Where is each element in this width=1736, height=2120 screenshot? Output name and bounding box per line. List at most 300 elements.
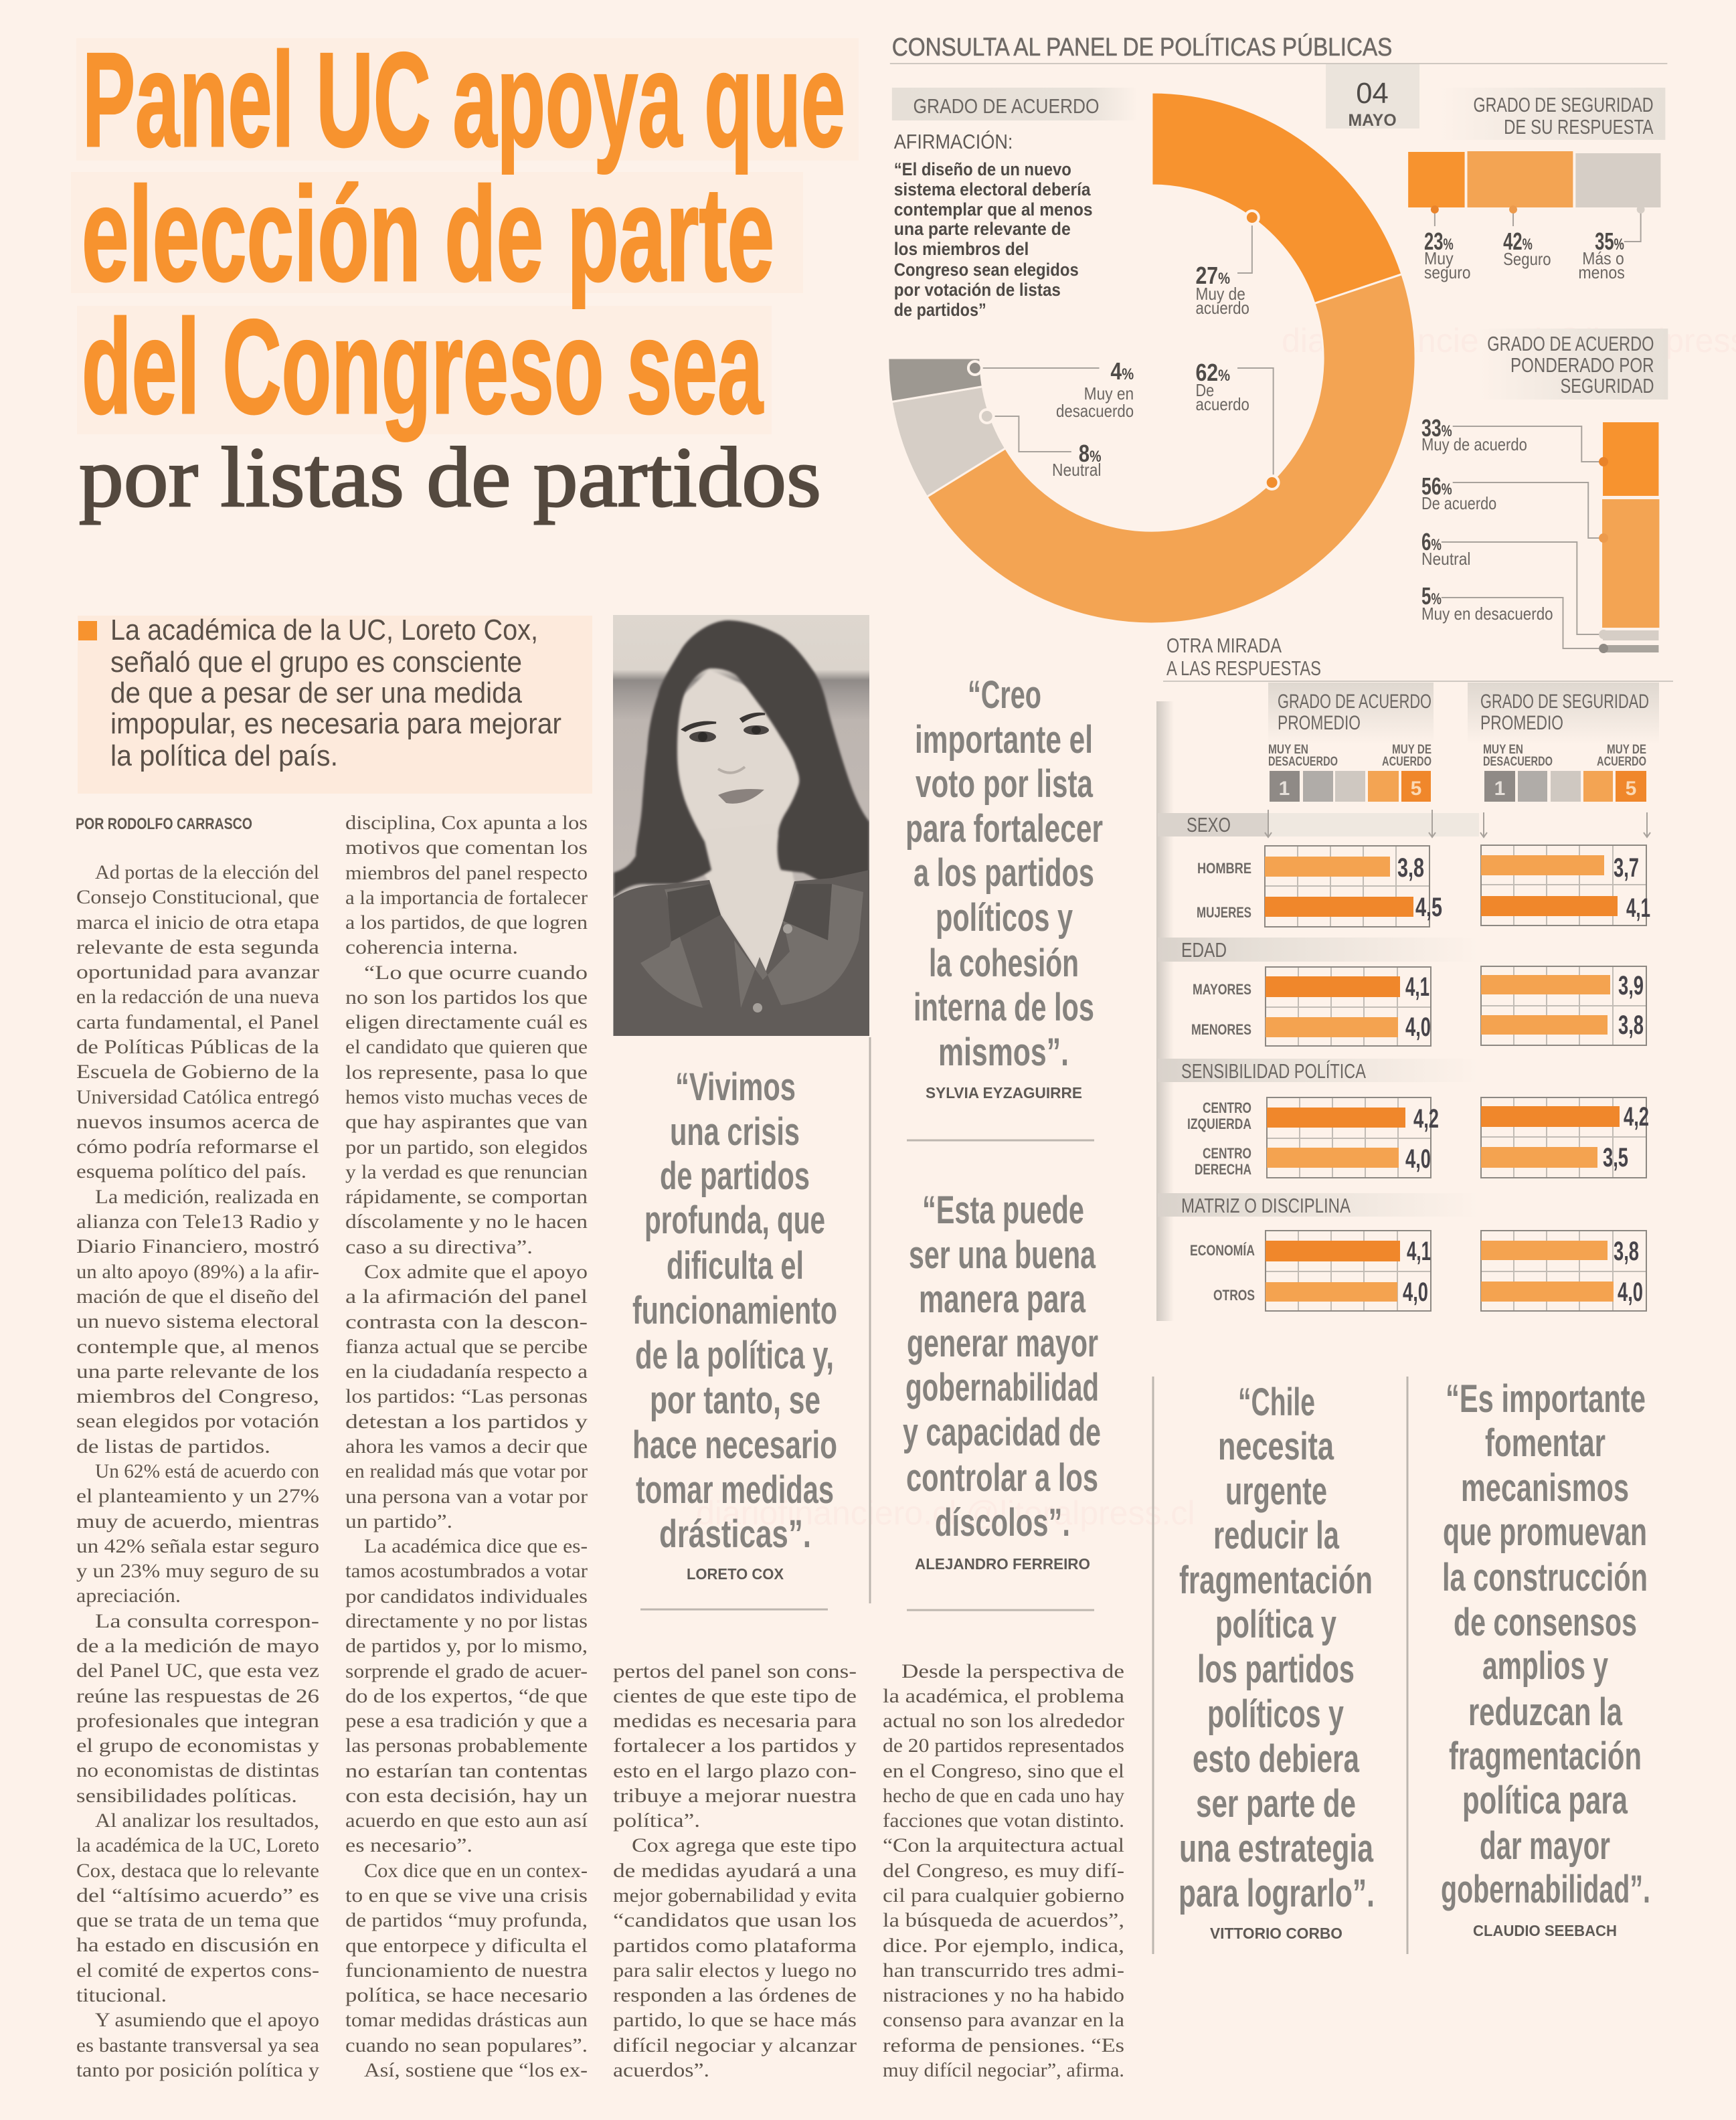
chart: sexo acuerdo: 4,5 <box>1415 893 1442 922</box>
quote: Claudio Seebach: amplios y <box>1482 1644 1608 1688</box>
quote: Vittorio Corbo: reducir la <box>1213 1514 1340 1557</box>
article column 2: no estarían tan contentas <box>345 1760 588 1782</box>
article column 3: partidos como plataforma <box>613 1935 857 1957</box>
article column 2: es necesario”. <box>345 1834 472 1856</box>
scale arrows <box>1265 810 1650 837</box>
quote: Alejandro Ferreiro: y capacidad de <box>903 1411 1101 1454</box>
byline: POR RODOLFO CARRASCO <box>76 815 252 833</box>
article column 2: motivos que comentan los <box>345 836 588 859</box>
row labels: sensibilidad politica: DERECHA <box>1195 1161 1251 1178</box>
quote: Claudio Seebach: política para <box>1462 1779 1628 1822</box>
donut chart: grado de acuerdo: Neutral <box>1052 461 1101 480</box>
chart: sexo seguridad: 4,1 <box>1626 893 1650 923</box>
article column 3: tribuye a mejorar nuestra <box>613 1785 857 1807</box>
grado de acuerdo label and statement: Congreso sean elegidos <box>894 260 1079 280</box>
article column 1: sensibilidades políticas. <box>76 1785 297 1807</box>
quote: Alejandro Ferreiro: díscolos”. <box>935 1501 1070 1544</box>
article column 1: de listas de partidos. <box>76 1435 270 1458</box>
quote: Vittorio Corbo <box>1179 1381 1375 1942</box>
column header: grado de seguridad promedio: DESACUERDO <box>1483 755 1553 769</box>
article column 1: Un 62% está de acuerdo con <box>95 1460 319 1482</box>
subtitle: por listas de partidos: por listas de partidos <box>79 430 821 525</box>
article column 2: “Lo que ocurre cuando <box>364 962 588 984</box>
row labels: matriz o disciplina <box>1190 1242 1255 1304</box>
article column 4: han transcurrido tres admi- <box>883 1959 1124 1981</box>
quote: Loreto Cox: tomar medidas <box>636 1468 834 1512</box>
article column 1: una parte relevante de los <box>76 1360 319 1383</box>
grado de acuerdo label and statement: los miembros del <box>894 239 1029 259</box>
deck summary box <box>78 614 592 794</box>
chart: edad acuerdo: 4,1 <box>1405 972 1429 1002</box>
article column 1: cómo podría reformarse el <box>76 1136 319 1158</box>
article column 2: un partido”. <box>345 1510 452 1532</box>
article column 4: del Congreso, es muy difí- <box>883 1860 1124 1882</box>
column header: grado de acuerdo promedio: PROMEDIO <box>1278 712 1361 734</box>
article column 2: coherencia interna. <box>345 936 518 958</box>
quote: Loreto Cox <box>632 1065 837 1583</box>
chart: edad seguridad: 3,8 <box>1618 1010 1644 1040</box>
chart: matriz seguridad: 4,0 <box>1618 1277 1643 1307</box>
row labels: sexo <box>1197 860 1251 921</box>
quote: Sylvia Eyzaguirre <box>905 673 1103 1101</box>
row labels: sensibilidad politica: IZQUIERDA <box>1187 1116 1251 1132</box>
section band: sexo: SEXO <box>1187 813 1231 836</box>
section band: matriz o disciplina: MATRIZ O DISCIPLINA <box>1181 1194 1351 1217</box>
article column 3: “candidatos que usan los <box>613 1909 857 1931</box>
section heading: Consulta al panel: CONSULTA AL PANEL DE POLÍTICAS PÚBLICAS <box>892 33 1392 62</box>
row labels: edad <box>1191 981 1251 1038</box>
quote: Sylvia Eyzaguirre: voto por lista <box>916 762 1094 806</box>
headline highlight backgrounds and orange title: elección de parte <box>82 160 774 309</box>
donut chart: grado de acuerdo <box>888 92 1415 624</box>
quote: Vittorio Corbo: fragmentación <box>1179 1559 1373 1602</box>
quote: Alejandro Ferreiro: manera para <box>919 1277 1086 1321</box>
article column 1: alianza con Tele13 Radio y <box>76 1211 319 1233</box>
donut chart: grado de acuerdo: acuerdo <box>1195 395 1249 414</box>
article column 1: tanto por posición política y <box>76 2059 319 2081</box>
article column 1: un alto apoyo (89%) a la afir- <box>76 1261 319 1283</box>
article column 1: esquema político del país. <box>76 1160 307 1182</box>
chart: sexo acuerdo <box>1265 846 1442 927</box>
row labels: sexo: MUJERES <box>1197 904 1251 921</box>
article column 4: nistraciones y no ha habido <box>883 1984 1124 2006</box>
quote: Loreto Cox: hace necesario <box>632 1423 837 1467</box>
quote: Vittorio Corbo: política y <box>1215 1603 1336 1646</box>
article column 1: un 42% señala estar seguro <box>76 1535 319 1557</box>
article column 1: Consejo Constitucional, que <box>76 886 319 908</box>
donut chart: grado de acuerdo: Muy en <box>1084 385 1134 404</box>
article column 3: mejor gobernabilidad y evita <box>613 1884 857 1907</box>
grado de seguridad: stacked bar: 23% <box>1424 228 1454 255</box>
article column 2: cuando no sean populares”. <box>345 2034 588 2056</box>
article column 3: partido, lo que se hace más <box>613 2009 857 2031</box>
column header: grado de seguridad promedio: ACUERDO <box>1597 755 1646 769</box>
column header: grado de seguridad promedio: GRADO DE SEGURIDAD <box>1480 691 1649 713</box>
section band: edad: EDAD <box>1181 938 1227 962</box>
grado de seguridad: header: DE SU RESPUESTA <box>1504 115 1654 139</box>
article column 1: en la redacción de una nueva <box>76 986 319 1008</box>
article column 2: funcionamiento de nuestra <box>345 1959 588 1981</box>
row labels: sensibilidad politica <box>1187 1099 1251 1178</box>
column header: grado de acuerdo promedio: 1 <box>1279 778 1290 800</box>
section heading: otra mirada: A LAS RESPUESTAS <box>1166 656 1321 680</box>
article column 1: es bastante transversal ya sea <box>76 2034 319 2056</box>
quote: Alejandro Ferreiro: ser una buena <box>909 1233 1096 1277</box>
article column 4: hecho de que en cada uno hay <box>883 1785 1124 1807</box>
chart: edad acuerdo <box>1266 967 1431 1046</box>
section heading: otra mirada: OTRA MIRADA <box>1166 634 1282 657</box>
article column 1: mación de que el diseño del <box>76 1286 319 1308</box>
quote: Loreto Cox: “Vivimos <box>675 1065 796 1109</box>
section band: matriz o disciplina <box>1158 1193 1479 1217</box>
row labels: edad: MENORES <box>1191 1021 1251 1038</box>
grado de seguridad: stacked bar: menos <box>1578 264 1625 282</box>
grado de acuerdo ponderado: vertical stacked bar: Neutral <box>1421 550 1470 569</box>
article column 2: que entorpece y dificulta el <box>345 1935 588 1957</box>
chart: sensibilidad seguridad: 4,2 <box>1624 1102 1649 1132</box>
deck summary box: impopular, es necesaria para mejorar <box>110 707 561 740</box>
article column 2: a la importancia de fortalecer <box>345 887 588 909</box>
column header: grado de seguridad promedio: MUY DE <box>1607 743 1646 757</box>
quote: Vittorio Corbo: políticos y <box>1207 1692 1344 1736</box>
quote: Sylvia Eyzaguirre: mismos”. <box>938 1031 1069 1074</box>
article column 2: Así, sostiene que “los ex- <box>364 2059 588 2081</box>
chart: edad seguridad <box>1481 966 1646 1045</box>
grado de acuerdo ponderado: vertical stacked bar: Muy en desacuerdo <box>1421 605 1553 624</box>
article column 2: de partidos “muy profunda, <box>345 1909 588 1931</box>
article column 3: responden a las órdenes de <box>613 1984 857 2006</box>
article column 1: y un 23% muy seguro de su <box>76 1560 319 1582</box>
grado de acuerdo ponderado: vertical stacked bar: Muy de acuerdo <box>1421 436 1527 454</box>
deck summary box: la política del país. <box>110 739 338 772</box>
article column 2: miembros del panel respecto <box>345 862 588 884</box>
quote: Alejandro Ferreiro: generar mayor <box>907 1322 1098 1365</box>
quote: Vittorio Corbo: los partidos <box>1197 1648 1355 1691</box>
date tag: MAYO <box>1348 111 1397 130</box>
column header: grado de acuerdo promedio <box>1268 683 1434 802</box>
grado de seguridad: stacked bar: seguro <box>1424 264 1470 282</box>
quote: Claudio Seebach: la construcción <box>1442 1556 1648 1599</box>
quote: Claudio Seebach: fomentar <box>1485 1421 1605 1465</box>
article column 3: de medidas ayudará a una <box>613 1860 857 1882</box>
article column 1: de Políticas Públicas de la <box>76 1036 319 1058</box>
article column 1: marca el inicio de otra etapa <box>76 911 319 934</box>
article column 2: pese a esa tradición y que a <box>345 1710 588 1732</box>
grado de acuerdo ponderado: vertical stacked bar: 5% <box>1421 583 1442 610</box>
watermark <box>696 322 1736 1532</box>
quote: Loreto Cox: LORETO COX <box>687 1565 784 1583</box>
grado de acuerdo label and statement <box>892 88 1138 320</box>
article column 3: Cox agrega que este tipo <box>632 1834 857 1856</box>
headline highlight backgrounds and orange title: Panel UC apoya que <box>82 25 845 175</box>
donut chart: grado de acuerdo: desacuerdo <box>1056 402 1134 421</box>
grado de acuerdo ponderado: vertical stacked bar: 6% <box>1421 529 1442 555</box>
column header: grado de seguridad promedio: 1 <box>1494 778 1505 800</box>
left rule of comparison table <box>1156 701 1174 1321</box>
quote: Sylvia Eyzaguirre: la cohesión <box>929 942 1079 985</box>
article column 4: en el Congreso, sino que el <box>883 1760 1124 1782</box>
chart: sensibilidad acuerdo <box>1267 1097 1439 1178</box>
grado de seguridad: stacked bar: Más o <box>1582 250 1624 268</box>
article column 2: fianza actual que se percibe <box>345 1336 588 1358</box>
grado de acuerdo ponderado: header: PONDERADO POR <box>1510 353 1654 377</box>
chart: edad acuerdo: 4,0 <box>1405 1012 1431 1042</box>
watermark: diariofinanciero.cl @litoralpress.cl <box>696 1494 1195 1532</box>
article column 2: Cox dice que en un contex- <box>364 1860 588 1882</box>
quote: Vittorio Corbo: para lograrlo”. <box>1179 1872 1375 1915</box>
article column 4: consenso para avanzar en la <box>883 2009 1124 2031</box>
column header: grado de seguridad promedio: PROMEDIO <box>1480 712 1563 734</box>
grado de acuerdo label and statement: “El diseño de un nuevo <box>894 159 1071 179</box>
column header: grado de acuerdo promedio: GRADO DE ACUERDO <box>1278 691 1431 713</box>
article column 4: facciones que votan distinto. <box>883 1809 1124 1832</box>
article column 1: apreciación. <box>76 1585 181 1607</box>
quote: Claudio Seebach: “Es importante <box>1446 1377 1646 1421</box>
quote: Alejandro Ferreiro <box>903 1188 1101 1573</box>
row labels: edad: MAYORES <box>1193 981 1251 998</box>
column header: grado de acuerdo promedio: MUY EN <box>1268 743 1308 757</box>
article column 2: de partidos y, por lo mismo, <box>345 1635 588 1657</box>
article column 1: La consulta correspon- <box>95 1610 319 1632</box>
grado de acuerdo label and statement: contemplar que al menos <box>894 199 1093 219</box>
quote: Claudio Seebach: de consensos <box>1454 1601 1637 1644</box>
chart: sensibilidad seguridad: 3,5 <box>1603 1143 1628 1172</box>
article column 1: titucional. <box>76 1984 167 2006</box>
article column 1: del Panel UC, que esta vez <box>76 1660 319 1682</box>
grado de seguridad: stacked bar: Seguro <box>1503 250 1551 269</box>
grado de seguridad: stacked bar: Muy <box>1424 250 1454 268</box>
article column 4: cil para cualquier gobierno <box>883 1884 1124 1907</box>
article column 4: actual no son los alrededor <box>883 1710 1124 1732</box>
quote: Claudio Seebach: CLAUDIO SEEBACH <box>1473 1922 1617 1939</box>
article column 4: de 20 partidos representados <box>883 1735 1124 1757</box>
grado de acuerdo ponderado: header <box>1477 329 1668 400</box>
photo: portrait of Loreto Cox <box>613 615 869 1036</box>
article column 2: en la ciudadanía respecto a <box>345 1360 588 1383</box>
article column 1: Escuela de Gobierno de la <box>76 1061 319 1083</box>
article column 1: que se trata de un tema que <box>76 1909 319 1931</box>
quote: Vittorio Corbo: urgente <box>1225 1470 1327 1513</box>
section band: sensibilidad politica: SENSIBILIDAD POLÍTICA <box>1181 1059 1366 1083</box>
chart: matriz acuerdo: 4,1 <box>1407 1237 1431 1266</box>
article column 1: nuevos insumos acerca de <box>76 1111 319 1133</box>
article column 4: la búsqueda de acuerdos”, <box>883 1909 1124 1931</box>
quote: Claudio Seebach <box>1441 1377 1650 1939</box>
headline highlight backgrounds and orange title: del Congreso sea <box>82 292 764 442</box>
column header: grado de acuerdo promedio: MUY DE <box>1392 743 1431 757</box>
article column 4 <box>883 1660 1124 2081</box>
article column 1: ha estado en discusión en <box>76 1934 319 1956</box>
row labels: sensibilidad politica: CENTRO <box>1203 1099 1251 1116</box>
column header: grado de acuerdo promedio: 5 <box>1411 778 1421 800</box>
quote: Alejandro Ferreiro: “Esta puede <box>922 1188 1084 1232</box>
date tag: 04 <box>1356 77 1389 110</box>
article column 4: “Con la arquitectura actual <box>883 1834 1124 1856</box>
grado de acuerdo ponderado: vertical stacked bar: 33% <box>1421 415 1452 442</box>
deck summary box: La académica de la UC, Loreto Cox, <box>110 614 538 646</box>
quote: Vittorio Corbo: una estrategia <box>1179 1827 1374 1870</box>
quote: Sylvia Eyzaguirre: a los partidos <box>914 851 1094 895</box>
quote: Claudio Seebach: dar mayor <box>1480 1824 1610 1868</box>
quote: Loreto Cox: una crisis <box>670 1110 800 1154</box>
article column 1: profesionales que integran <box>76 1710 319 1732</box>
donut chart: grado de acuerdo: acuerdo <box>1195 299 1249 318</box>
quote: Sylvia Eyzaguirre: “Creo <box>968 673 1041 717</box>
article column 2: tamos acostumbrados a votar <box>345 1560 588 1582</box>
quote: Loreto Cox: de partidos <box>660 1154 810 1198</box>
article column 1 <box>76 861 319 2081</box>
quote: Claudio Seebach: reduzcan la <box>1468 1690 1623 1734</box>
article column 4: Desde la perspectiva de <box>901 1660 1124 1682</box>
quote: Sylvia Eyzaguirre: SYLVIA EYZAGUIRRE <box>926 1084 1082 1101</box>
grado de acuerdo ponderado: vertical stacked bar <box>1421 415 1659 653</box>
article column 2: a la afirmación del panel <box>345 1286 588 1308</box>
donut chart: grado de acuerdo: 62% <box>1195 359 1230 386</box>
article column 2: no son los partidos los que <box>345 986 588 1008</box>
grado de acuerdo ponderado: header: GRADO DE ACUERDO <box>1487 332 1654 355</box>
article column 1: carta fundamental, el Panel <box>76 1011 319 1033</box>
quote: Sylvia Eyzaguirre: importante el <box>915 718 1093 762</box>
article column 1: Cox, destaca que lo relevante <box>76 1860 319 1882</box>
quote: Claudio Seebach: mecanismos <box>1461 1466 1629 1510</box>
donut chart: grado de acuerdo: De <box>1195 381 1214 400</box>
donut chart: grado de acuerdo: Muy de <box>1195 285 1245 304</box>
article column 1: un nuevo sistema electoral <box>76 1310 319 1332</box>
article column 3: acuerdos”. <box>613 2059 709 2081</box>
article column 2: por un partido, son elegidos <box>345 1136 588 1158</box>
quote: Sylvia Eyzaguirre: para fortalecer <box>905 807 1103 851</box>
quote: Vittorio Corbo: necesita <box>1218 1425 1334 1468</box>
article column 1: Universidad Católica entregó <box>76 1086 319 1108</box>
article column 1: la académica de la UC, Loreto <box>76 1834 319 1856</box>
quote: Loreto Cox: funcionamiento <box>632 1289 837 1332</box>
article column 2 <box>345 812 588 2081</box>
article column 2: y la verdad es que renuncian <box>345 1161 588 1183</box>
article column 2: contrasta con la descon- <box>345 1311 588 1333</box>
quote: Claudio Seebach: que promuevan <box>1443 1510 1647 1554</box>
article column 1: oportunidad para avanzar <box>76 961 319 983</box>
grado de seguridad: header <box>1439 88 1665 140</box>
article column 3: cientes de que este tipo de <box>613 1685 857 1707</box>
article column 2: acuerdo en que esto aun así <box>345 1809 588 1832</box>
grado de seguridad: header: GRADO DE SEGURIDAD <box>1473 93 1654 116</box>
article column 2: directamente y no por listas <box>345 1610 588 1632</box>
chart: sexo seguridad <box>1481 845 1650 925</box>
section band: edad <box>1158 938 1479 962</box>
row labels: sexo: HOMBRE <box>1197 860 1251 877</box>
article column 1: el comité de expertos cons- <box>76 1959 319 1981</box>
chart: sexo seguridad: 3,7 <box>1614 853 1639 883</box>
article column 2: por candidatos individuales <box>345 1585 588 1607</box>
column header: grado de seguridad promedio: 5 <box>1626 778 1636 800</box>
grado de seguridad: stacked bar: 35% <box>1595 228 1624 255</box>
grado de acuerdo ponderado: vertical stacked bar: 56% <box>1421 473 1452 500</box>
article column 2: el candidato que quieren que <box>345 1036 588 1058</box>
headline highlight backgrounds and orange title <box>71 25 859 442</box>
grado de acuerdo label and statement: de partidos” <box>894 300 986 320</box>
article column 1: el grupo de economistas y <box>76 1735 319 1757</box>
article column 2: to en que se vive una crisis <box>345 1884 588 1907</box>
quote: Loreto Cox: drásticas”. <box>659 1512 811 1556</box>
chart: matriz seguridad <box>1481 1231 1646 1311</box>
section band: sexo <box>1158 813 1479 836</box>
quote: Loreto Cox: dificulta el <box>667 1244 804 1288</box>
grado de acuerdo ponderado: vertical stacked bar: De acuerdo <box>1421 495 1496 513</box>
chart: matriz seguridad: 3,8 <box>1614 1237 1639 1266</box>
quote: Claudio Seebach: fragmentación <box>1449 1735 1642 1778</box>
article column 3: esto en el largo plazo con- <box>613 1760 857 1782</box>
quote: Vittorio Corbo: VITTORIO CORBO <box>1210 1925 1342 1942</box>
article column 1: reúne las respuestas de 26 <box>76 1685 319 1707</box>
article column 2: una persona van a votar por <box>345 1486 588 1508</box>
article column 2: La académica dice que es- <box>364 1535 588 1557</box>
quote: Vittorio Corbo: ser parte de <box>1196 1782 1356 1826</box>
quote: Vittorio Corbo: “Chile <box>1238 1381 1315 1424</box>
grado de acuerdo label and statement: AFIRMACIÓN: <box>894 130 1013 153</box>
article column 2: con esta decisión, hay un <box>345 1785 588 1807</box>
chart: sensibilidad acuerdo: 4,2 <box>1413 1104 1439 1134</box>
article column 3: pertos del panel son cons- <box>613 1660 857 1682</box>
grado de acuerdo label and statement: por votación de listas <box>894 280 1061 300</box>
article column 4: muy difícil negociar”, afirma. <box>883 2059 1124 2081</box>
deck summary box: de que a pesar de ser una medida <box>110 677 522 709</box>
quote: Alejandro Ferreiro: ALEJANDRO FERREIRO <box>915 1555 1090 1573</box>
article column 2: las personas probablemente <box>345 1735 588 1757</box>
article column 2: tomar medidas drásticas aun <box>345 2009 588 2031</box>
article column 4: dice. Por ejemplo, indica, <box>883 1935 1124 1957</box>
article column 4: reforma de pensiones. “Es <box>883 2034 1124 2056</box>
grado de acuerdo ponderado: header: SEGURIDAD <box>1561 374 1654 398</box>
column header: grado de seguridad promedio: MUY EN <box>1483 743 1523 757</box>
article column 1: Y asumiendo que el apoyo <box>95 2009 319 2031</box>
donut chart: grado de acuerdo: 4% <box>1110 358 1134 385</box>
quote: Sylvia Eyzaguirre: políticos y <box>936 896 1073 940</box>
grado de acuerdo label and statement: GRADO DE ACUERDO <box>914 94 1100 118</box>
article column 3: medidas es necesaria para <box>613 1710 857 1732</box>
quote: Sylvia Eyzaguirre: interna de los <box>914 986 1094 1029</box>
article column 2: ahora les vamos a decir que <box>345 1435 588 1458</box>
article column 4: la académica, el problema <box>883 1685 1124 1707</box>
quote: Loreto Cox: por tanto, se <box>650 1379 820 1422</box>
article column 1: contemple que, al menos <box>76 1336 319 1358</box>
section heading: otra mirada <box>1163 634 1673 682</box>
article column 1: La medición, realizada en <box>95 1186 319 1208</box>
quote: Alejandro Ferreiro: gobernabilidad <box>905 1366 1099 1409</box>
chart: sexo acuerdo: 3,8 <box>1397 853 1424 883</box>
article column 2: que hay aspirantes que van <box>345 1111 588 1133</box>
quote: Vittorio Corbo: esto debiera <box>1193 1737 1360 1781</box>
article column 2: los partidos: “Las personas <box>345 1385 588 1407</box>
article column 1: sean elegidos por votación <box>76 1410 319 1432</box>
article column 2: eligen directamente cuál es <box>345 1011 588 1033</box>
article column 1: muy de acuerdo, mientras <box>76 1510 319 1532</box>
article column 1: Diario Financiero, mostró <box>76 1235 319 1257</box>
article column 3 <box>613 1660 857 2081</box>
grado de acuerdo label and statement: una parte relevante de <box>894 219 1071 239</box>
article column 1: miembros del Congreso, <box>76 1385 319 1407</box>
article column 2: los represente, pasa lo que <box>345 1061 588 1083</box>
article column 3: política”. <box>613 1809 700 1832</box>
chart: sensibilidad seguridad <box>1481 1097 1649 1178</box>
donut chart: grado de acuerdo: 8% <box>1079 440 1101 467</box>
article column 2: disciplina, Cox apunta a los <box>345 812 588 834</box>
quote: Loreto Cox: profunda, que <box>644 1199 825 1242</box>
article column 3: para salir electos y luego no <box>613 1959 857 1981</box>
article column 2: política, se hace necesario <box>345 1984 588 2006</box>
chart: matriz acuerdo <box>1266 1231 1431 1311</box>
grado de acuerdo label and statement: sistema electoral debería <box>894 179 1092 199</box>
article column 1: de a la medición de mayo <box>76 1635 319 1657</box>
